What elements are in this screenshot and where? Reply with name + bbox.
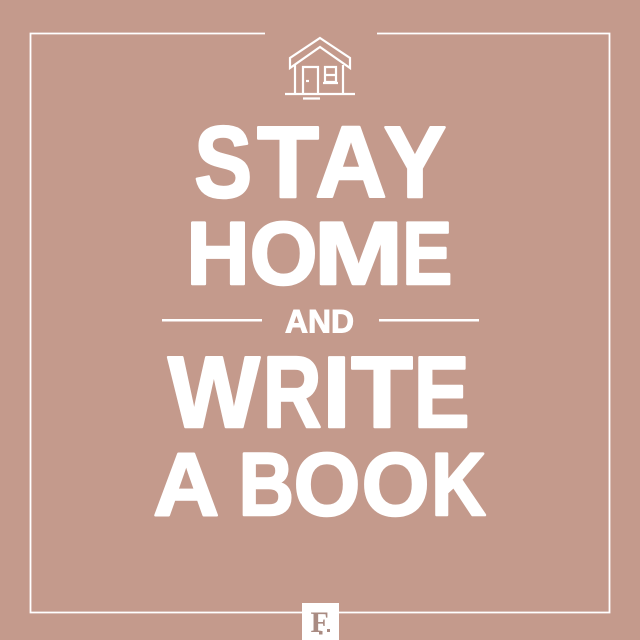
divider: right — [379, 319, 479, 322]
title: home: O — [250, 203, 317, 303]
title: stay: Y — [384, 107, 446, 219]
title: a book: O — [294, 434, 360, 534]
title: home: M — [314, 203, 403, 303]
title: home: H — [186, 203, 250, 303]
title: write: W — [168, 337, 261, 449]
logo — [302, 603, 339, 640]
title: a book: K — [431, 434, 486, 534]
logo: F — [310, 606, 329, 639]
title: a book: O — [362, 434, 429, 534]
title: a book: B — [239, 434, 294, 534]
title: write: E — [414, 337, 470, 449]
title: a book: A — [153, 434, 217, 534]
title: stay: A — [315, 107, 387, 219]
icon: house — [285, 38, 355, 98]
title: stay: T — [257, 107, 319, 219]
title: write: T — [351, 337, 413, 449]
title: home: E — [402, 203, 452, 303]
title: write: R — [263, 337, 322, 449]
divider: left — [162, 319, 262, 322]
title: write: I — [322, 337, 351, 449]
title: stay: S — [194, 107, 252, 219]
subheading: and: AND — [285, 304, 354, 340]
